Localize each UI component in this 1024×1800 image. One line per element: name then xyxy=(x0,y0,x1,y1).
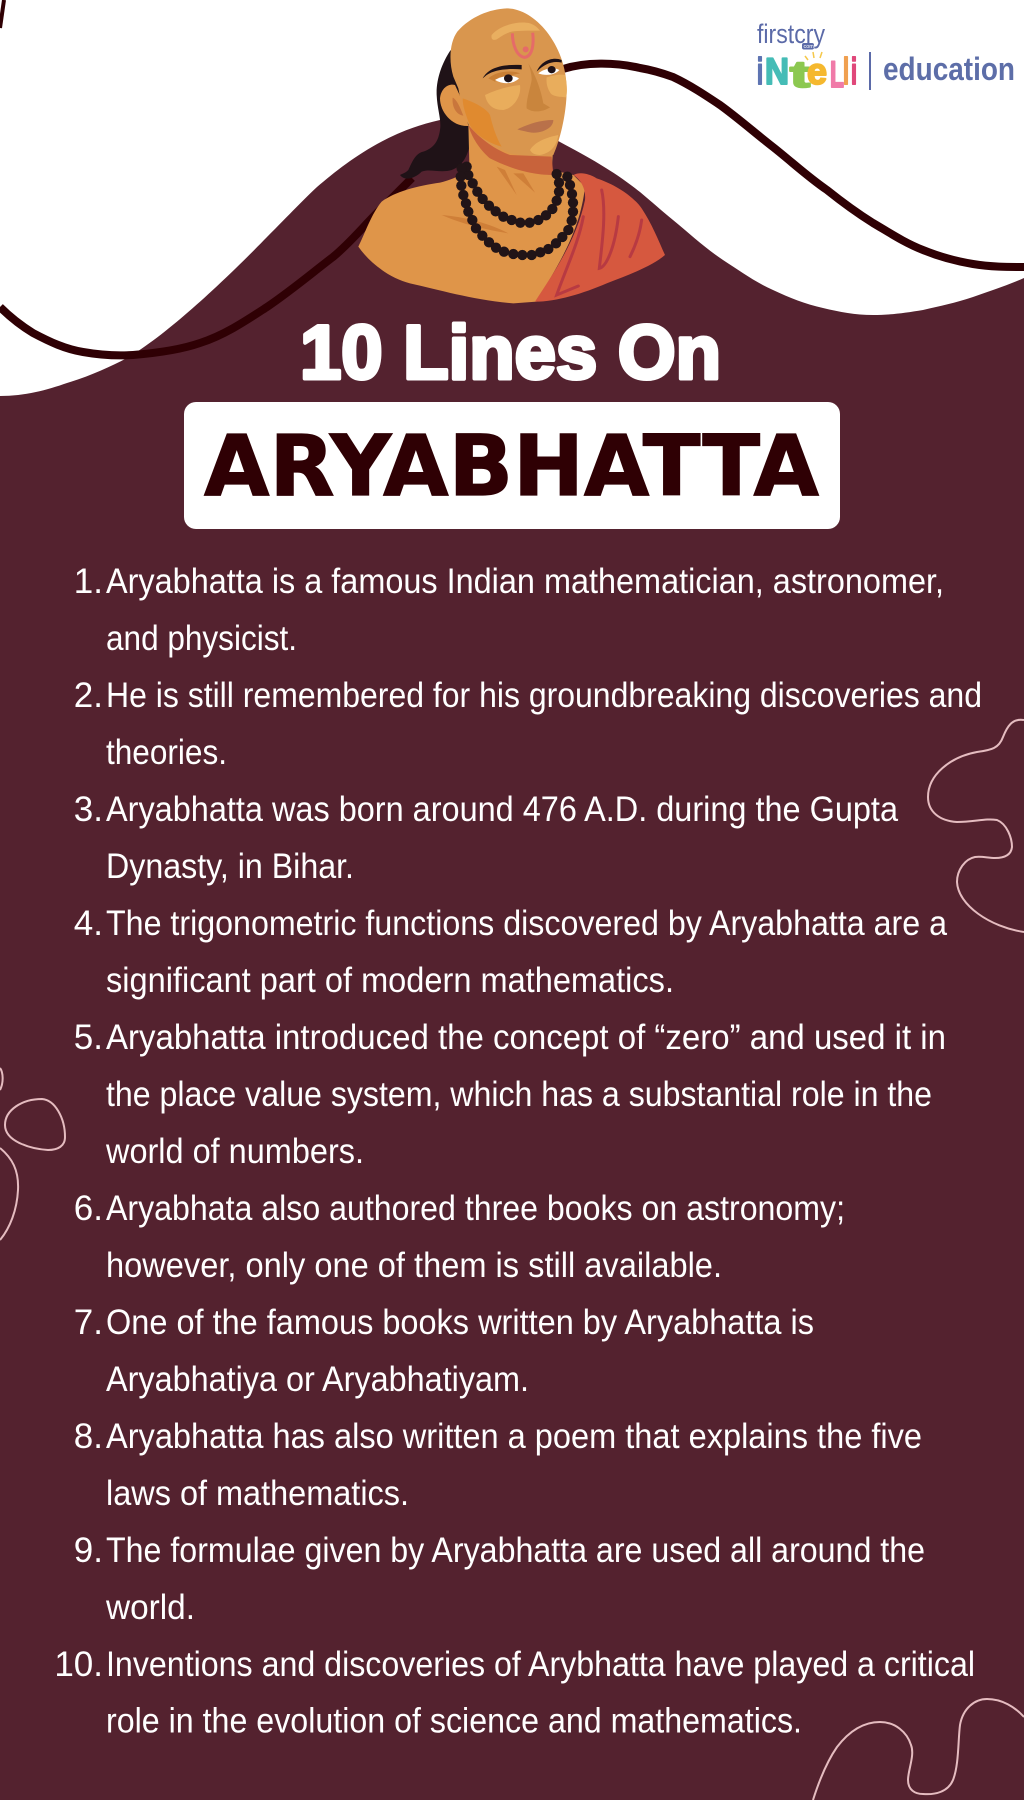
inner ear xyxy=(453,98,463,116)
banner text: ARYABHATTA: ARYABHATTA xyxy=(204,417,819,515)
fact 8 xyxy=(74,1417,922,1513)
fact 3: Dynasty, in Bihar. xyxy=(106,847,354,886)
fact 7: One of the famous books written by Aryabhatta is xyxy=(106,1303,814,1342)
fact 10: Inventions and discoveries of Arybhatta have played a critical xyxy=(106,1645,975,1684)
fact 1: Aryabhatta is a famous Indian mathematician, astronomer, xyxy=(106,562,944,601)
robe folds xyxy=(557,190,642,295)
fact 6 xyxy=(74,1189,845,1285)
shoulders and neck xyxy=(358,123,585,303)
logo firstcry wordmark: firstcry xyxy=(757,19,825,49)
logo intelli wordmark: i xyxy=(757,51,763,92)
fact 5: the place value system, which has a substantial role in the xyxy=(106,1075,932,1114)
forehead highlight xyxy=(491,23,540,40)
ear xyxy=(440,85,468,126)
fact 6: Aryabhata also authored three books on astronomy; xyxy=(106,1189,845,1228)
logo intelli wordmark: L xyxy=(830,54,844,95)
fact 2: 2. xyxy=(74,676,103,715)
fact 5: 5. xyxy=(74,1018,103,1057)
cheek highlights xyxy=(485,75,567,155)
fact 7 xyxy=(74,1303,814,1399)
fact 4: The trigonometric functions discovered by Aryabhatta are a xyxy=(106,904,947,943)
fact 1: 1. xyxy=(74,562,103,601)
forehead tilak xyxy=(512,33,533,57)
logo intelli wordmark: l xyxy=(843,51,849,92)
fact 7: Aryabhatiya or Aryabhatiyam. xyxy=(106,1360,529,1399)
fact 2: theories. xyxy=(106,733,227,772)
eyebrows xyxy=(483,59,562,78)
title banner xyxy=(184,402,840,529)
side face shade xyxy=(463,98,502,147)
fact 6: 6. xyxy=(74,1189,103,1228)
fact 5 xyxy=(74,1018,946,1171)
hair xyxy=(400,50,471,179)
fact 10: role in the evolution of science and mathematics. xyxy=(106,1702,802,1740)
fact 9: 9. xyxy=(74,1531,103,1570)
right iris xyxy=(548,66,556,73)
fact 8: laws of mathematics. xyxy=(106,1474,409,1513)
fact 9 xyxy=(74,1531,925,1627)
portrait of Aryabhatta xyxy=(358,8,665,303)
left eye xyxy=(495,76,519,83)
fact 4 xyxy=(74,904,947,1000)
list of ten facts xyxy=(54,562,982,1740)
fact 5: Aryabhatta introduced the concept of “zero” and used it in xyxy=(106,1018,946,1057)
fact 10 xyxy=(54,1645,975,1740)
logo intelli wordmark: t xyxy=(790,54,810,95)
eye shadow xyxy=(488,72,520,82)
fact 3: Aryabhatta was born around 476 A.D. during the Gupta xyxy=(106,790,898,829)
fact 9: The formulae given by Aryabhatta are used all around the xyxy=(106,1531,925,1570)
fact 3: 3. xyxy=(74,790,103,829)
lips xyxy=(517,120,553,133)
logo intelli wordmark: N xyxy=(765,51,789,92)
necklace xyxy=(455,161,578,260)
fact 5: world of numbers. xyxy=(105,1132,364,1171)
fact 6: however, only one of them is still available. xyxy=(106,1246,722,1285)
title: 10 Lines On: 10 Lines On xyxy=(300,310,721,396)
logo: FirstCry Intelli education xyxy=(757,19,1015,95)
fact 8: Aryabhatta has also written a poem that explains the five xyxy=(106,1417,922,1456)
neck folds xyxy=(442,167,535,233)
robe xyxy=(535,173,665,302)
fact 7: 7. xyxy=(74,1303,103,1342)
right eye xyxy=(538,68,559,75)
fact 4: significant part of modern mathematics. xyxy=(106,961,674,1000)
logo sun rays xyxy=(805,52,822,60)
fact 1 xyxy=(74,562,944,658)
fact 1: and physicist. xyxy=(106,619,297,658)
logo com pill: com xyxy=(804,44,814,50)
logo intelli wordmark xyxy=(757,51,857,95)
fact 9: world. xyxy=(105,1588,195,1627)
head xyxy=(450,8,567,156)
nose xyxy=(527,63,550,111)
left iris xyxy=(504,74,513,82)
logo intelli wordmark: e xyxy=(807,51,827,92)
logo intelli wordmark: i xyxy=(851,51,857,92)
jaw shadow xyxy=(468,125,553,175)
fact 10: 10. xyxy=(54,1645,103,1684)
fact 4: 4. xyxy=(74,904,103,943)
tilak dot xyxy=(523,46,529,52)
dark wavy line xyxy=(0,0,1024,355)
fact 8: 8. xyxy=(74,1417,103,1456)
fact 2 xyxy=(74,676,982,772)
logo divider xyxy=(869,52,871,90)
fact 3 xyxy=(74,790,898,886)
